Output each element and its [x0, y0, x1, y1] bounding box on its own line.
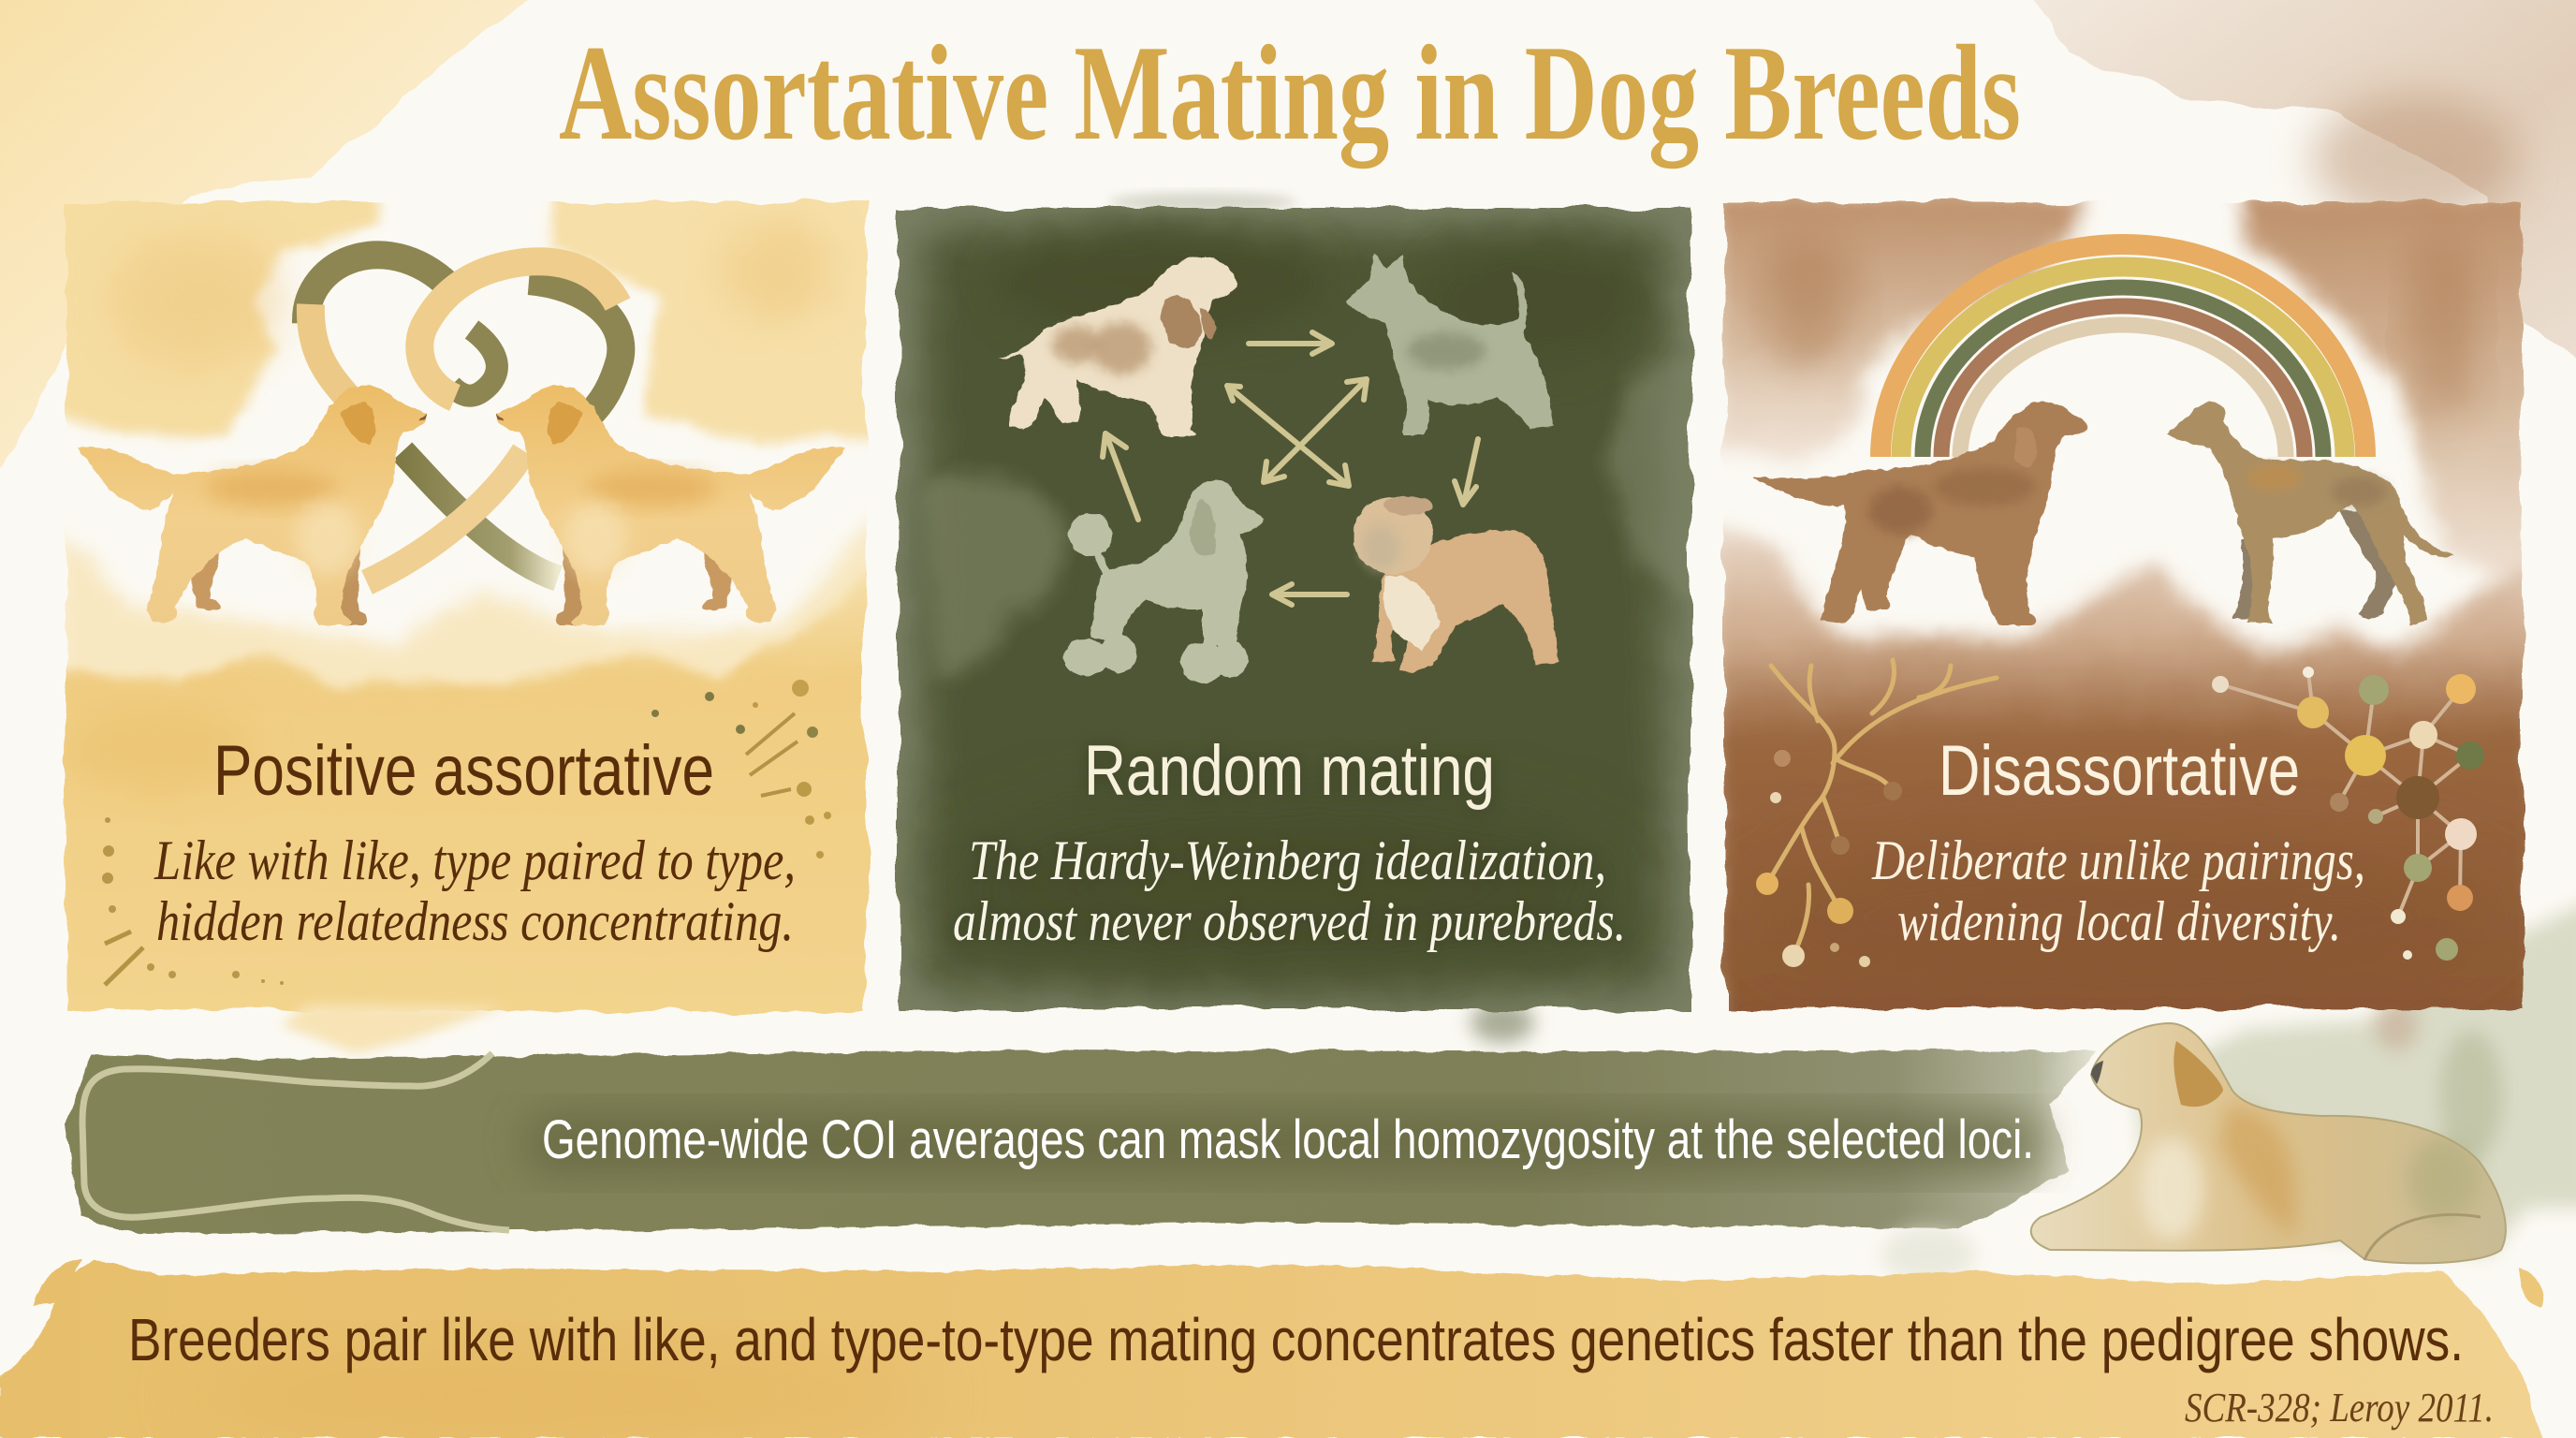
text: disassortative description: widening local diversity.: [1897, 890, 2341, 952]
panel tail curl: [281, 1004, 505, 1053]
top left corner wash: [0, 0, 552, 496]
icon: resting dog: [2031, 1023, 2506, 1263]
text: positive assortative description: Like with like, type paired to type,: [154, 829, 796, 891]
callout strip: COI note: [66, 1050, 2097, 1283]
bottom takeaway band: [0, 1259, 2546, 1438]
icon: intertwined heart ribbons: [306, 255, 621, 582]
icon: poodle: [1063, 480, 1264, 683]
icon: left golden retriever: [78, 386, 427, 625]
heading: disassortative: Disassortative: [1939, 731, 2300, 811]
icon: greyhound: [2166, 401, 2455, 625]
icon: terrier: [1347, 254, 1554, 435]
icon: branching pedigree: [1756, 660, 1997, 967]
text: citation: SCR-328; Leroy 2011.: [2185, 1385, 2494, 1431]
text: random mating description: The Hardy-Weinberg idealization,: [969, 829, 1606, 891]
arrows: mating pairs: [1103, 332, 1478, 605]
panel: positive assortative: [56, 187, 880, 1053]
text: COI note: Genome-wide COI averages can mask local homozygosity at the selected loci.: [542, 1109, 2034, 1170]
top right brown stain: [2312, 94, 2518, 225]
panel: random mating: [889, 193, 1704, 1043]
panel 1 washes: [56, 187, 880, 1030]
panel 3 washes: [1713, 192, 2537, 1030]
icon: diversity network: [2212, 667, 2484, 961]
icon: rainbow arch: [1881, 244, 2365, 457]
strip wash: [66, 1050, 2097, 1234]
decorative speckles bottom left: [102, 817, 284, 985]
icon: setter: [1753, 401, 2087, 625]
ribbon outline: [82, 1053, 509, 1230]
panel: disassortative: [1713, 192, 2537, 1030]
text: disassortative description: Deliberate unlike pairings,: [1871, 829, 2365, 891]
lower right sage wash: [2134, 899, 2576, 1255]
heading: random mating: Random mating: [1084, 731, 1495, 811]
top right corner wash: [2022, 0, 2576, 370]
icon: spaniel: [999, 257, 1237, 436]
icon: right golden retriever: [496, 386, 845, 625]
text: random mating description: almost never observed in purebreds.: [953, 890, 1626, 952]
decorative speckles top right: [651, 680, 831, 858]
title: Assortative Mating in Dog Breeds: [559, 17, 2021, 169]
panel 2 wash: [889, 197, 1704, 1020]
heading: positive assortative: Positive assortative: [213, 731, 714, 811]
text: positive assortative description: hidden relatedness concentrating.: [156, 890, 794, 952]
band wash: [0, 1259, 2546, 1438]
icon: bulldog: [1353, 496, 1559, 672]
